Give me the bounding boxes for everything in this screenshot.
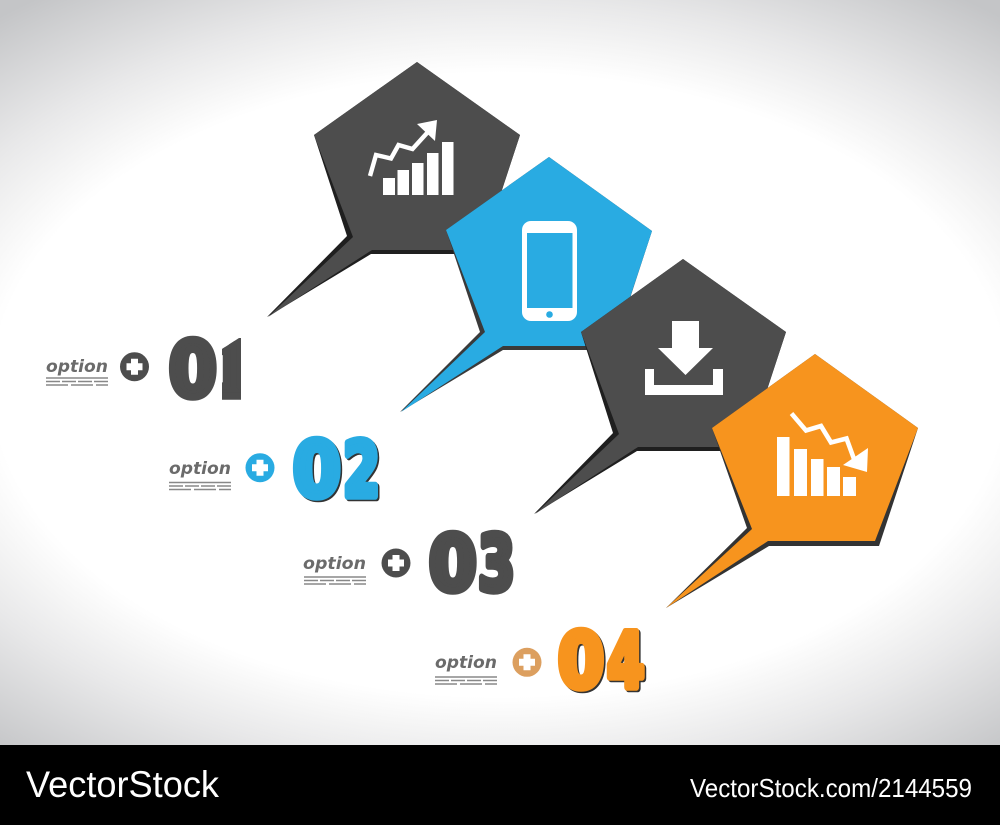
number 03: 0 <box>429 521 477 609</box>
speech pentagon 3: download <box>534 259 786 514</box>
number 04 <box>558 617 646 707</box>
option row 4 <box>435 617 646 707</box>
placeholder lines 1 <box>46 378 108 385</box>
number 02 <box>293 426 382 516</box>
number 03: 3 <box>478 520 515 609</box>
icon: smartphone <box>522 221 577 321</box>
number 02: 2 <box>343 426 380 515</box>
plus badge 1 <box>120 352 149 381</box>
icon: falling bar chart <box>777 414 868 496</box>
footer bar <box>0 745 1000 825</box>
placeholder lines 4 <box>435 677 497 684</box>
plus badge 3 <box>382 548 410 578</box>
icon: download arrow and tray <box>645 321 723 395</box>
speech pentagon 2: smartphone <box>400 157 652 412</box>
option label 2: option <box>169 459 231 479</box>
number 01: 0 <box>169 327 217 415</box>
plus badge 4 <box>512 648 542 677</box>
option row 2 <box>169 426 382 516</box>
number 04: 4 <box>607 617 645 705</box>
footer logo: VectorStock <box>26 764 219 805</box>
number 02: 0 <box>293 427 341 515</box>
placeholder lines 3 <box>304 577 366 584</box>
option label 1: option <box>46 357 108 377</box>
footer url: VectorStock.com/2144559 <box>690 773 972 803</box>
option label 4: option <box>435 653 497 673</box>
number 04: 0 <box>560 618 606 707</box>
number 04: 0 <box>558 617 604 705</box>
option row 3 <box>303 520 515 609</box>
number 02: 0 <box>294 428 342 516</box>
speech pentagon 4: falling chart <box>666 354 918 608</box>
number 01: 1 <box>205 325 258 414</box>
placeholder lines 2 <box>169 482 231 490</box>
number 03 <box>429 520 515 609</box>
option row 1 <box>46 336 241 401</box>
number 02: 2 <box>344 428 382 516</box>
number 04: 4 <box>608 618 646 707</box>
icon: rising bar chart <box>370 120 454 195</box>
plus badge 2 <box>246 453 274 482</box>
speech pentagon 1: growth chart <box>267 62 520 317</box>
option label 3: option <box>303 554 366 574</box>
number 01 <box>168 336 241 401</box>
